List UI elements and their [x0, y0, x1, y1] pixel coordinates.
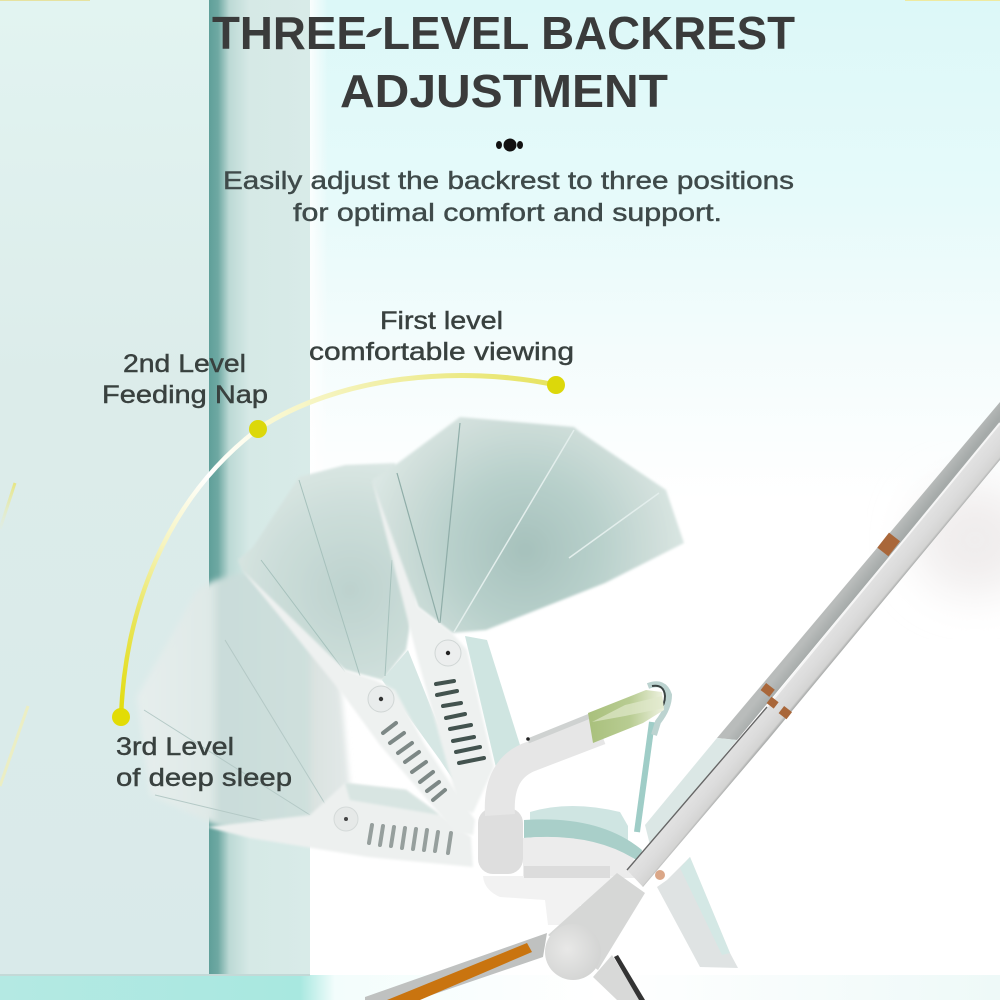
- level dot: third: [112, 708, 130, 726]
- label: first level: comfortable viewing: [309, 338, 574, 366]
- label: second level: 2nd Level: [123, 350, 246, 378]
- stroller: lower legs: [365, 933, 645, 1000]
- subtitle: for optimal comfort and support.: [293, 199, 722, 227]
- stroller: copper brackets: [761, 533, 900, 719]
- label: third level: [116, 733, 292, 792]
- third-level vent slots: [369, 825, 451, 853]
- second-level vent slots: [383, 723, 445, 800]
- label: first level: First level: [380, 307, 503, 335]
- ornament: dots: [496, 138, 523, 152]
- subtitle: Easily adjust the backrest to three positions: [223, 167, 794, 195]
- title: THREE-LEVEL BACKREST: [212, 7, 795, 59]
- small yellow light streaks: [0, 483, 28, 786]
- arc connecting the three levels: [112, 375, 565, 726]
- first-level vent slots: [436, 681, 484, 763]
- title: [212, 7, 795, 117]
- stroller: second-level backrest: [238, 463, 475, 835]
- label: second level: Feeding Nap: [102, 381, 268, 409]
- level dot: second: [249, 420, 267, 438]
- level dot: first: [547, 376, 565, 394]
- stroller: pivot joint: [545, 873, 645, 980]
- stroller: seat base: [478, 806, 642, 925]
- label: first level: [309, 307, 574, 366]
- subtitle: [223, 167, 794, 227]
- stroller: push-bar tubes: [627, 402, 1000, 887]
- stroller: armrest and green grip: [500, 684, 669, 832]
- label: second level: [102, 350, 268, 409]
- stroller: faded third-level backrest: [137, 556, 473, 867]
- title: ADJUSTMENT: [340, 65, 668, 117]
- label: third level: 3rd Level: [116, 733, 234, 761]
- stroller: first-level backrest: [372, 417, 684, 813]
- stroller: rear leg panel: [657, 857, 738, 968]
- label: third level: of deep sleep: [116, 764, 292, 792]
